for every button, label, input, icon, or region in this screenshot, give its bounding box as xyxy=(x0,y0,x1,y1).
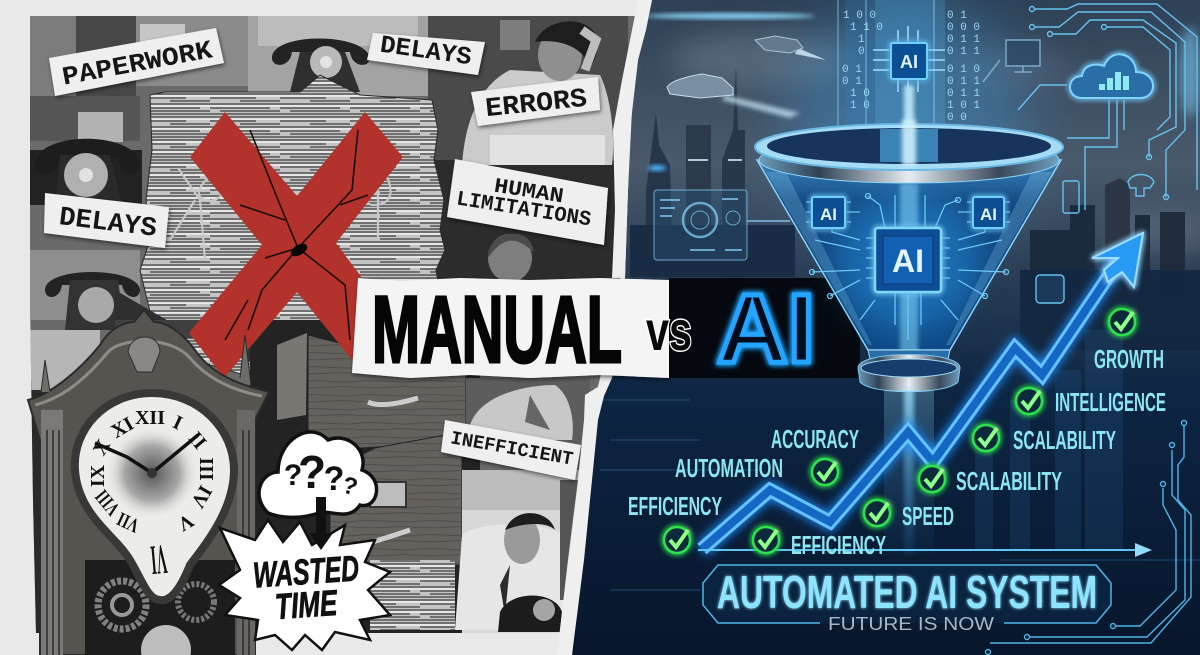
binary digits: 0 1 0 xyxy=(947,64,980,76)
AI chip right: AI xyxy=(980,205,997,224)
flying car 2 xyxy=(755,36,826,60)
AI chip top: AI xyxy=(900,52,918,72)
binary digits: 0 1 1 xyxy=(947,46,980,58)
speech cloud with question marks: ? xyxy=(339,472,360,501)
binary digits: 1 0 xyxy=(850,88,870,100)
label: paperwork: PAPERWORK xyxy=(60,35,215,93)
binary digits: 1 0 1 xyxy=(947,100,980,112)
starburst: wasted time: WASTED xyxy=(252,547,360,596)
phone lower left xyxy=(30,272,140,385)
speech cloud with question marks: ? xyxy=(298,446,326,498)
clock dial: VI xyxy=(149,535,169,583)
data stream xyxy=(838,0,980,160)
growth arrow chart xyxy=(702,233,1143,549)
paper stack xyxy=(140,75,445,385)
label: errors: ERRORS xyxy=(484,85,589,125)
clock dial: IX xyxy=(87,464,109,487)
binary digits: 0 0 0 xyxy=(947,22,980,34)
arrow from cloud to starburst xyxy=(309,497,333,550)
check: efficiency left xyxy=(664,527,690,553)
label: accuracy: ACCURACY xyxy=(771,424,859,454)
funnel xyxy=(755,120,1063,392)
office backdrop xyxy=(30,16,628,320)
check: efficiency bottom xyxy=(753,527,779,553)
check: growth xyxy=(1109,309,1135,335)
AI chip left: AI xyxy=(820,205,837,224)
panel: manual side collage xyxy=(28,16,650,655)
title backing: torn paper and black band xyxy=(352,278,860,378)
clock dial: I xyxy=(169,411,186,435)
skyline xyxy=(630,66,1200,350)
phone left xyxy=(30,139,142,205)
label: scalability lower: SCALABILITY xyxy=(956,466,1062,496)
arrow head xyxy=(1092,233,1143,287)
check: intelligence xyxy=(1016,388,1042,414)
starburst: wasted time: TIME xyxy=(274,582,339,627)
circuit lines xyxy=(1018,4,1197,303)
flying car 1 xyxy=(667,74,800,118)
AI chip center xyxy=(875,228,941,292)
label: inefficient: INEFFICIENT xyxy=(449,427,575,471)
binary digits: 0 1 1 xyxy=(947,34,980,46)
chart background columns xyxy=(975,330,1123,550)
binary digits: 0 xyxy=(858,46,865,58)
AI chip right xyxy=(973,197,1004,228)
clock dial xyxy=(75,393,234,600)
red X xyxy=(189,112,403,378)
label: delays left xyxy=(44,193,169,248)
banner tagline: FUTURE IS NOW xyxy=(828,614,994,634)
starburst: wasted time xyxy=(219,520,390,650)
panel: AI side background xyxy=(560,0,1200,655)
check: speed xyxy=(864,500,890,526)
clock dial: XI xyxy=(107,413,138,443)
photo: slumped worker xyxy=(466,378,590,448)
label: automation: AUTOMATION xyxy=(675,453,783,483)
funnel neck xyxy=(858,350,960,392)
label: human limitations: LIMITATIONS xyxy=(455,188,593,232)
AI chip top xyxy=(873,26,945,96)
clock dial: III xyxy=(195,457,217,481)
label: human limitations: HUMAN xyxy=(492,176,565,209)
speech cloud with question marks: ? xyxy=(324,460,344,498)
clock dial: V xyxy=(173,509,197,536)
check: scalability lower xyxy=(919,466,945,492)
binary digits: 0 1 xyxy=(842,76,862,88)
phone top xyxy=(272,38,370,92)
monitor icon xyxy=(983,40,1040,82)
speech cloud with question marks xyxy=(259,432,377,531)
binary digits: 1 0 0 xyxy=(843,10,876,22)
data stream below funnel xyxy=(884,390,934,555)
binary digits: 0 1 xyxy=(947,10,967,22)
cloud icon xyxy=(1070,54,1153,98)
label: speed: SPEED xyxy=(902,501,954,531)
check: accuracy xyxy=(812,459,838,485)
title: MANUAL vs AI: vs xyxy=(646,299,692,362)
binary digits: 0 1 xyxy=(842,64,862,76)
AI chip center: AI xyxy=(892,243,924,279)
photo: woman with head in hand xyxy=(488,234,534,282)
binary digits xyxy=(842,10,980,124)
chart baseline arrow xyxy=(698,543,1152,557)
photo: stressed man top right xyxy=(462,21,613,165)
title: MANUAL vs AI: AI xyxy=(717,274,815,383)
label: efficiency bottom: EFFICIENCY xyxy=(791,530,886,560)
label: paperwork xyxy=(49,28,224,96)
clock dial: VII xyxy=(114,507,143,537)
clock dial: X xyxy=(89,435,115,459)
label: scalability upper: SCALABILITY xyxy=(1013,425,1116,455)
chip traces xyxy=(806,194,1010,340)
binary digits: 1 xyxy=(858,34,865,46)
label: delays left: DELAYS xyxy=(57,203,158,245)
gears xyxy=(98,581,214,655)
filing cabinet drawers xyxy=(277,333,466,630)
check: scalability upper xyxy=(973,425,999,451)
desk and dark surround xyxy=(30,290,480,635)
phone hologram xyxy=(1128,174,1154,196)
binary digits: 0 0 xyxy=(947,112,967,124)
label: delays top: DELAYS xyxy=(378,31,473,72)
melting clock xyxy=(28,310,269,655)
label: efficiency left: EFFICIENCY xyxy=(628,491,722,521)
label: inefficient xyxy=(441,420,581,480)
AI chip left xyxy=(812,197,845,228)
binary digits: 1 1 0 xyxy=(850,22,883,34)
photo: man at desk xyxy=(455,470,590,635)
clock dial: II xyxy=(184,428,211,454)
funnel rim xyxy=(755,120,1063,183)
label: human limitations xyxy=(447,159,608,245)
system banner xyxy=(703,565,1111,634)
clock dial: VIII xyxy=(91,485,125,519)
binary digits: 0 1 1 xyxy=(947,88,980,100)
binary digits: 1 0 xyxy=(850,100,870,112)
clock dial: XII xyxy=(135,407,165,429)
torn white edge xyxy=(557,0,652,655)
binary digits: 0 1 1 xyxy=(947,76,980,88)
hologram dashboard xyxy=(654,190,790,260)
clock dial: IV xyxy=(186,481,216,512)
speech cloud with question marks: ? xyxy=(284,459,302,492)
bottom right circuit xyxy=(986,420,1191,654)
label: errors xyxy=(471,77,600,126)
title: MANUAL vs AI: MANUAL xyxy=(372,277,622,383)
